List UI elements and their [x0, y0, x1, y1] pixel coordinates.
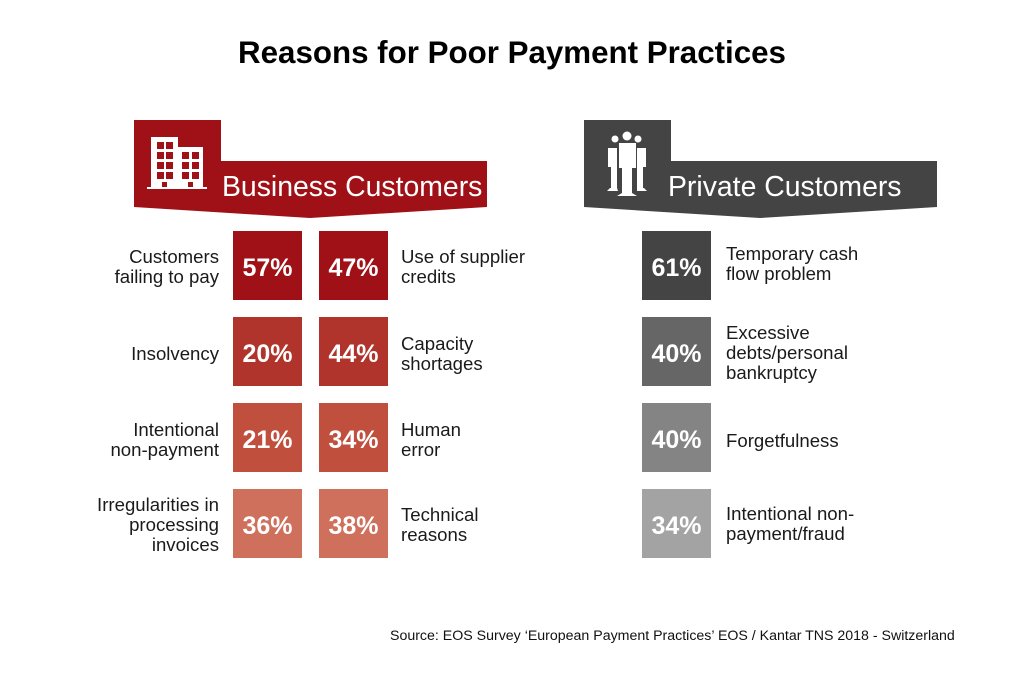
label: capacity shortages — [401, 333, 483, 374]
label: excessive debts/personal bankruptcy — [726, 322, 848, 383]
value: 21% — [233, 403, 302, 472]
label: use of supplier credits — [401, 246, 525, 287]
value: 40% — [642, 317, 711, 386]
label: human error: error — [401, 439, 440, 460]
title: Reasons for Poor Payment Practices — [238, 35, 786, 70]
value: 20%: 20% — [242, 340, 293, 368]
label: customers failing to pay — [114, 246, 219, 287]
value: 47% — [319, 231, 388, 300]
label: irregularities in processing invoices: invoices — [152, 534, 219, 555]
value: 36%: 36% — [242, 512, 293, 540]
icon: group of people — [607, 132, 647, 196]
label: irregularities in processing invoices: processing — [129, 514, 219, 535]
label: temporary cash flow problem — [726, 243, 858, 284]
label: human error — [401, 419, 461, 460]
icon: office buildings — [147, 137, 207, 189]
value: 44% — [319, 317, 388, 386]
label: intentional non-payment — [110, 419, 219, 460]
value: 34% — [319, 403, 388, 472]
value: 36% — [233, 489, 302, 558]
value: 40%: 40% — [651, 426, 702, 454]
label: excessive debts/personal bankruptcy: bankruptcy — [726, 362, 817, 383]
value: 38%: 38% — [328, 512, 379, 540]
value: 47%: 47% — [328, 254, 379, 282]
label: excessive debts/personal bankruptcy: Excessive — [726, 322, 810, 343]
value: 40% — [642, 403, 711, 472]
label: technical reasons: reasons — [401, 524, 467, 545]
value: 61%: 61% — [651, 254, 702, 282]
label: customers failing to pay: failing to pay — [115, 266, 219, 287]
label: temporary cash flow problem: flow problem — [726, 263, 831, 284]
value: 40%: 40% — [651, 340, 702, 368]
heading: private customers: Private Customers — [668, 171, 902, 203]
label: human error: Human — [401, 419, 461, 440]
label: technical reasons: Technical — [401, 504, 479, 525]
label: use of supplier credits: Use of supplier — [401, 246, 525, 267]
value: 57% — [233, 231, 302, 300]
label: use of supplier credits: credits — [401, 266, 456, 287]
value: 20% — [233, 317, 302, 386]
value: 21%: 21% — [242, 426, 293, 454]
label: intentional non-payment/fraud — [726, 503, 854, 544]
label: customers failing to pay: Customers — [129, 246, 219, 267]
value: 34% — [642, 489, 711, 558]
value: 57%: 57% — [242, 254, 293, 282]
heading: business customers: Business Customers — [222, 171, 482, 203]
value: 38% — [319, 489, 388, 558]
label: intentional non-payment: Intentional — [133, 419, 219, 440]
label: insolvency: Insolvency — [131, 343, 219, 364]
value: 34%: 34% — [651, 512, 702, 540]
value: 61% — [642, 231, 711, 300]
value: 44%: 44% — [328, 340, 379, 368]
label: intentional non-payment/fraud: Intentional non- — [726, 503, 854, 524]
label: intentional non-payment: non-payment — [110, 439, 219, 460]
panel: business customers header banner — [134, 120, 487, 218]
panel: private customers header banner — [584, 120, 937, 218]
label: irregularities in processing invoices: Irregularities in — [97, 494, 219, 515]
value: 34%: 34% — [328, 426, 379, 454]
label: forgetfulness: Forgetfulness — [726, 430, 839, 451]
label: intentional non-payment/fraud: payment/fraud — [726, 523, 845, 544]
label: capacity shortages: Capacity — [401, 333, 473, 354]
label: capacity shortages: shortages — [401, 353, 483, 374]
label: technical reasons — [401, 504, 479, 545]
source note: Source: EOS Survey ‘European Payment Practices’ EOS / Kantar TNS 2018 - Switzerland — [390, 628, 955, 644]
label: temporary cash flow problem: Temporary cash — [726, 243, 858, 264]
label: excessive debts/personal bankruptcy: debts/personal — [726, 342, 848, 363]
label: irregularities in processing invoices — [97, 494, 219, 555]
